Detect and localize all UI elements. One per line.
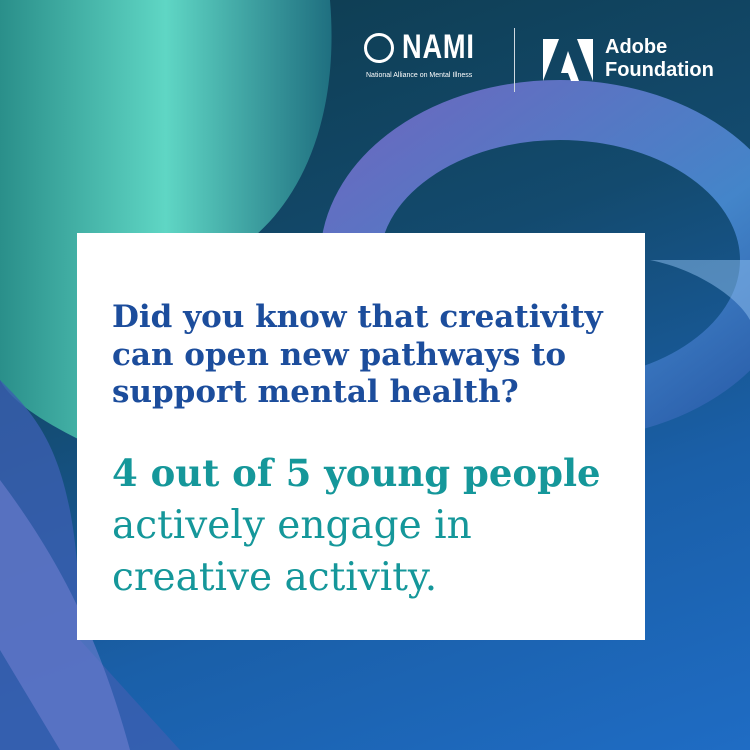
question text: [112, 299, 604, 410]
question text: Did you know that creativity: [112, 299, 603, 335]
question text: support mental health?: [112, 374, 519, 410]
logo: Adobe Foundation: Foundation: [605, 59, 714, 81]
logo: NAMI: [364, 28, 475, 79]
logo: NAMI: National Alliance on Mental Illness: [366, 72, 472, 79]
statistic text: [112, 451, 601, 600]
panel: white card: [77, 233, 645, 640]
logo: NAMI: NAMI: [402, 28, 475, 66]
divider: [514, 28, 515, 92]
statistic text: 4 out of 5 young people: [112, 451, 601, 495]
question text: can open new pathways to: [112, 336, 566, 372]
statistic text: actively engage in: [112, 503, 472, 548]
statistic text: creative activity.: [112, 555, 437, 600]
logo: Adobe Foundation: [543, 36, 714, 81]
logo: Adobe Foundation: Adobe: [605, 36, 667, 58]
